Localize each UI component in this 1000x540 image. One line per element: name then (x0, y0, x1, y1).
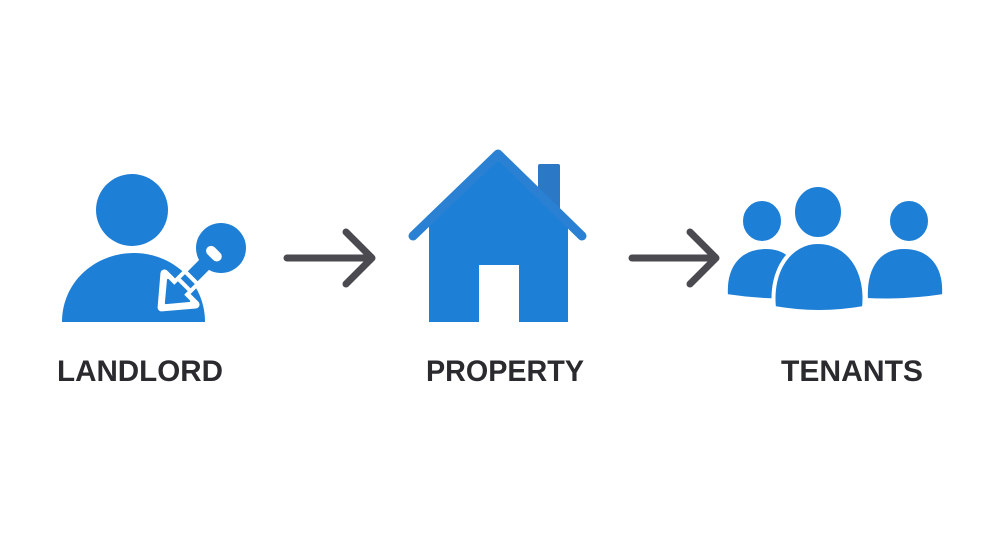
key (141, 207, 262, 328)
label: landlord: LANDLORD (57, 355, 223, 388)
label: property: PROPERTY (426, 355, 584, 388)
arrow 1 (287, 232, 372, 284)
label: tenants: TENANTS (781, 355, 923, 388)
icon: tenants (726, 185, 944, 312)
icon: landlord with key (62, 174, 262, 328)
arrow 2 (632, 232, 716, 284)
icon: house (413, 154, 582, 322)
